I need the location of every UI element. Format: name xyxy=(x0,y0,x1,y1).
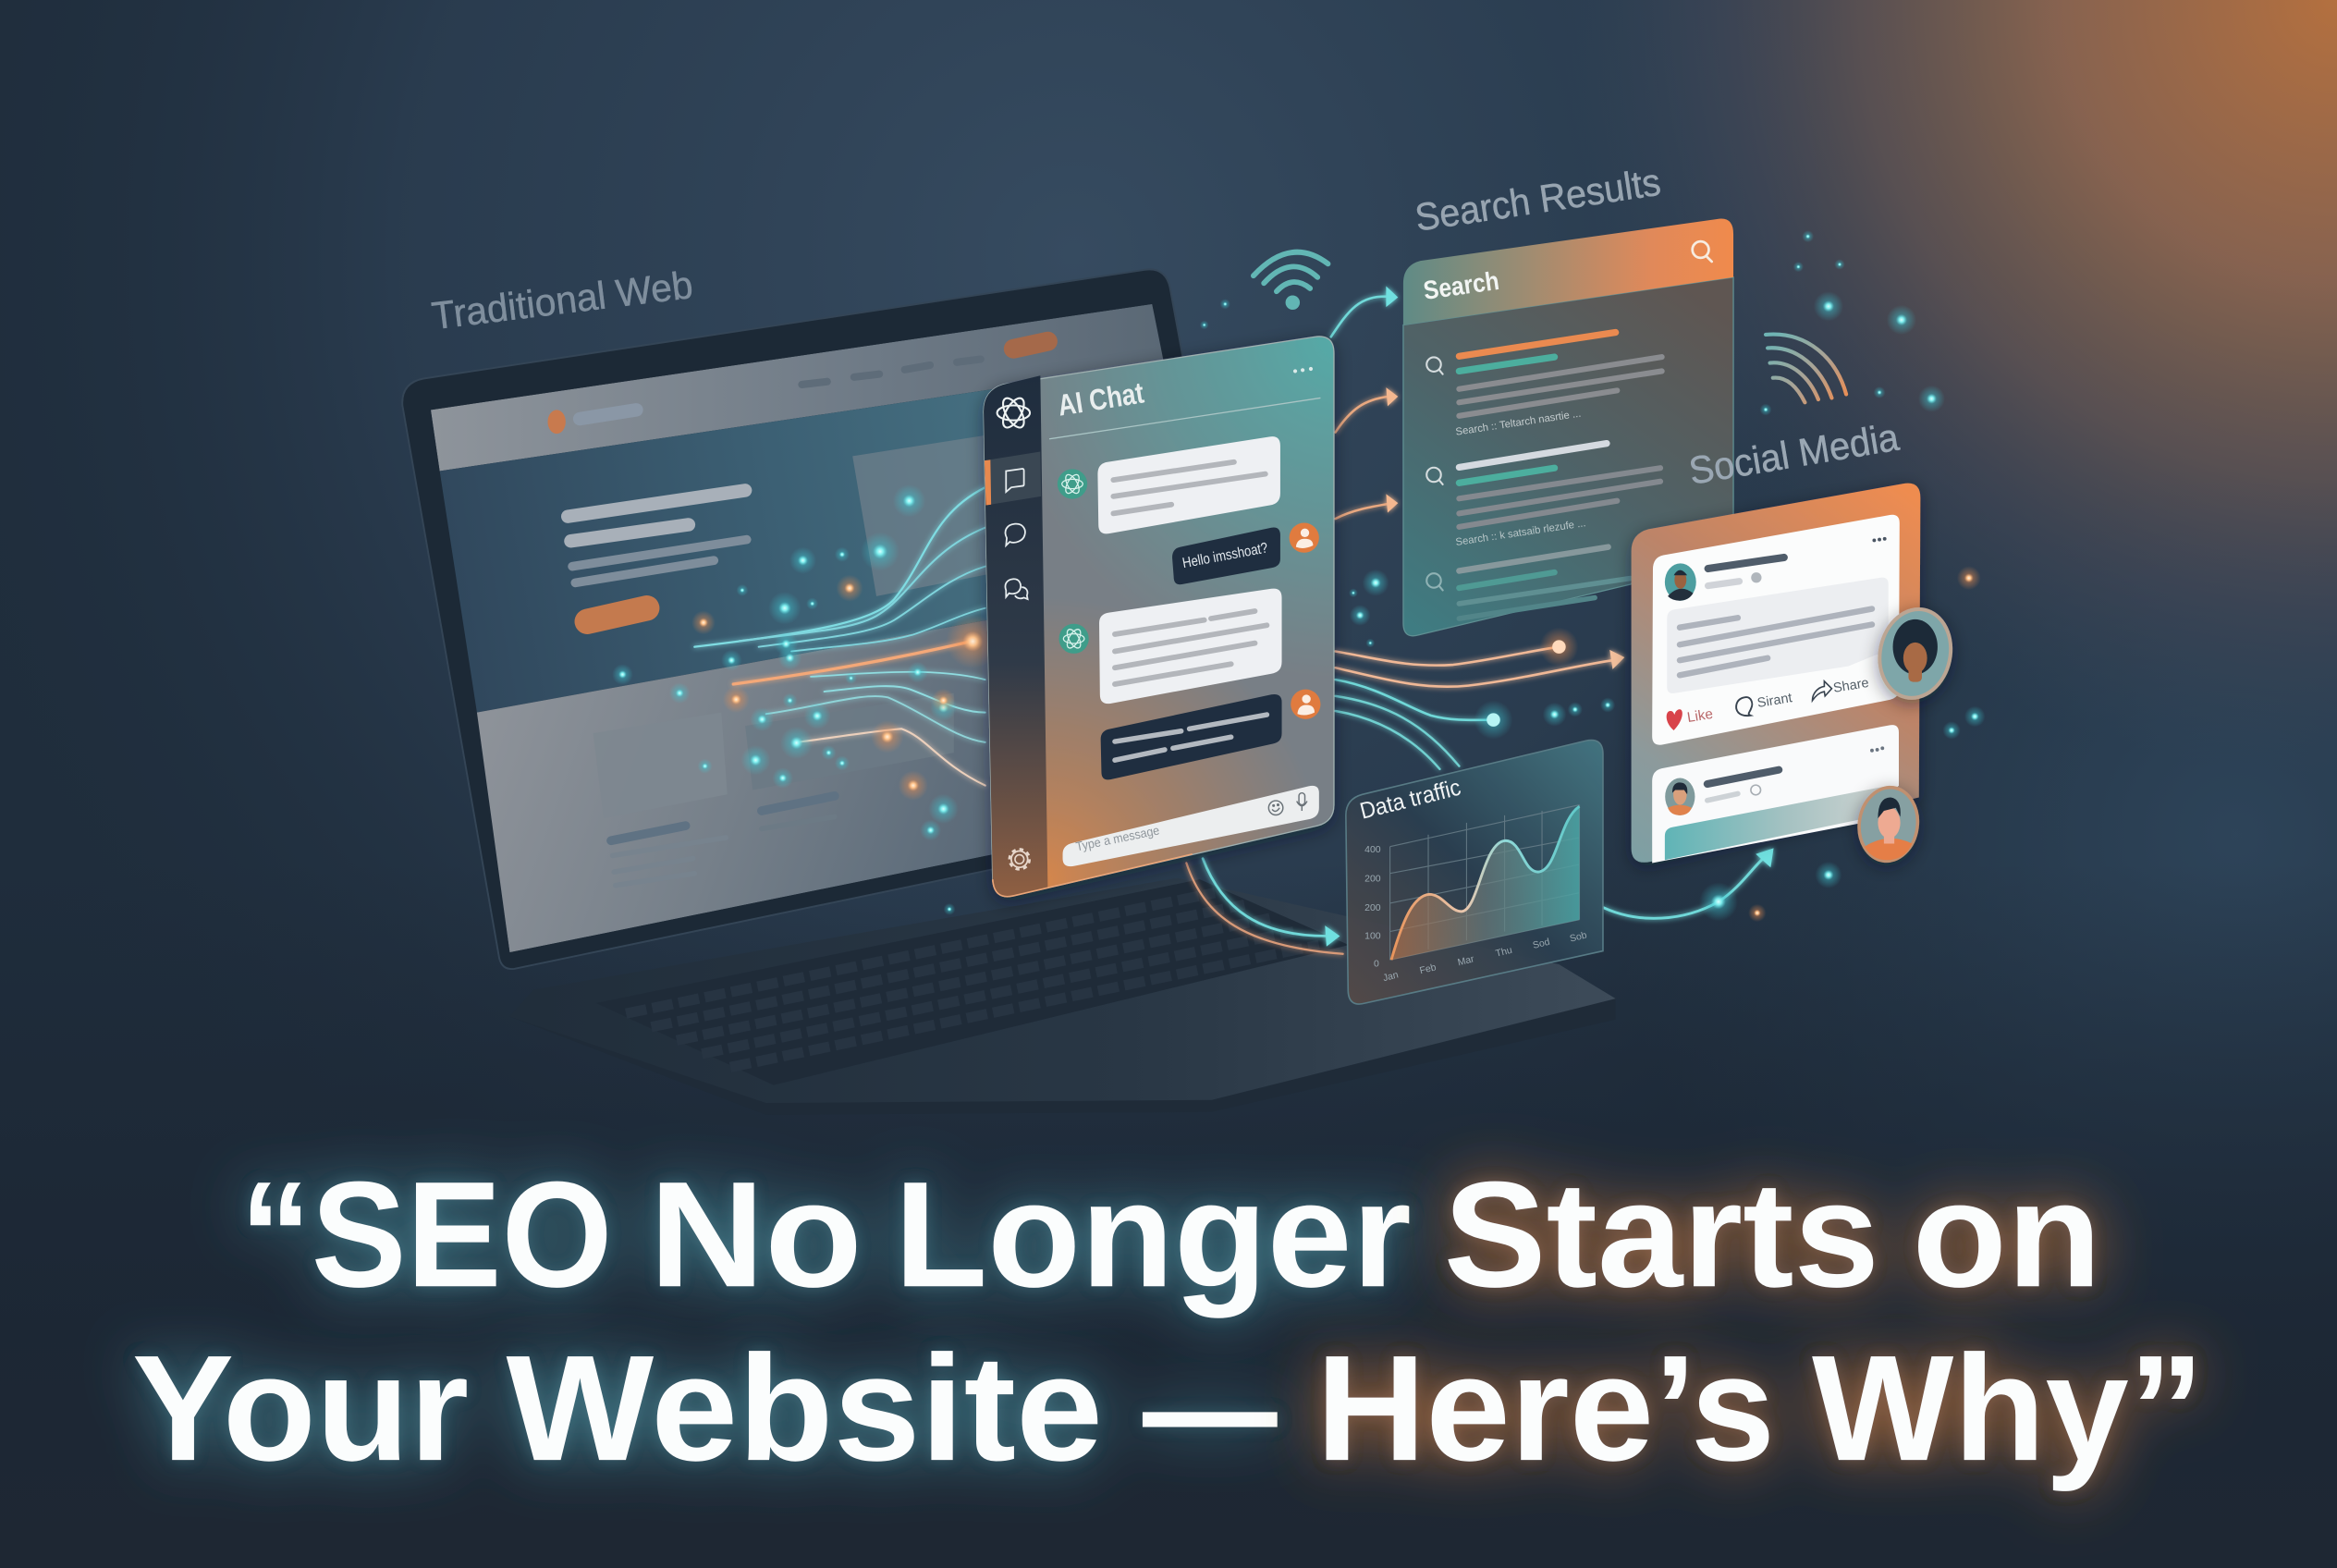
chat menu dots xyxy=(1293,367,1313,374)
laptop xyxy=(402,269,1616,1115)
search title: Search xyxy=(1422,265,1501,305)
post 1 content box xyxy=(1667,578,1889,693)
chat divider xyxy=(1049,398,1320,439)
icon: chat square xyxy=(1006,469,1024,492)
x axis labels: Feb xyxy=(1419,962,1438,976)
white bubble 1 xyxy=(1097,436,1280,533)
y axis labels: 100 xyxy=(1364,932,1381,942)
comment button xyxy=(1736,691,1793,716)
teal to dot xyxy=(1336,680,1492,720)
data to social xyxy=(1604,848,1774,918)
hero text lines xyxy=(568,490,747,582)
arrow to search orange 1 xyxy=(1336,387,1398,433)
laptop base and keyboard xyxy=(509,878,1616,1115)
post card 1 xyxy=(1652,515,1900,745)
result 1: Search :: Teltarch nasrtie ... xyxy=(1455,409,1582,438)
dark bubble 2 xyxy=(1101,694,1282,779)
x axis labels xyxy=(1382,930,1588,984)
title right part line 1: Starts xyxy=(1444,1150,1879,1318)
active sidebar row xyxy=(985,451,1041,506)
chat title: AI Chat xyxy=(1056,375,1146,423)
laptop lid xyxy=(402,269,1266,969)
label: Traditional Web: Traditional Web xyxy=(430,263,695,337)
glowing particles left xyxy=(612,484,999,915)
icon: AI logo xyxy=(997,395,1030,431)
chart grid xyxy=(1390,805,1579,960)
comment button: Sirant xyxy=(1756,691,1793,711)
data panel background xyxy=(1346,741,1603,1004)
teal to data 1 xyxy=(1336,696,1459,766)
panel: search results xyxy=(1403,219,1733,636)
post 2 menu xyxy=(1870,746,1884,753)
result 2 xyxy=(1426,444,1660,548)
title right part line 2: Why” xyxy=(1812,1324,2204,1492)
input placeholder: Type a message xyxy=(1074,823,1160,853)
x axis labels: Sob xyxy=(1569,930,1588,945)
post 1 meta xyxy=(1708,572,1762,586)
bubble 1 lines xyxy=(1113,462,1266,513)
arrow to dot orange xyxy=(1336,647,1559,666)
screen header xyxy=(431,304,1166,471)
floating avatar small xyxy=(1854,784,1922,864)
title left part line 1: Longer xyxy=(894,1150,1412,1318)
nav items xyxy=(801,360,981,385)
y axis labels: 0 xyxy=(1374,959,1379,969)
search header xyxy=(1403,219,1733,325)
lower cards xyxy=(593,713,728,818)
data title: Data traffic xyxy=(1357,775,1463,825)
post 2 meta xyxy=(1707,785,1761,801)
dark bubble 2 lines xyxy=(1115,715,1266,760)
panel: social media xyxy=(1632,484,1959,864)
data flow lines into chat xyxy=(694,487,985,786)
chat lower rim xyxy=(993,854,1193,897)
chart area xyxy=(1391,806,1579,960)
title left part line 1: No xyxy=(649,1150,863,1318)
site name bar xyxy=(580,410,636,419)
x axis labels: Thu xyxy=(1495,946,1513,960)
dark bubble 1 xyxy=(1172,527,1280,584)
title left part line 2: — xyxy=(1143,1324,1278,1492)
label: Social Media: Social Media xyxy=(1686,415,1903,493)
screen hero xyxy=(440,389,993,712)
hero button xyxy=(587,608,647,621)
white bubble 2 xyxy=(1099,589,1282,704)
icon: signal arcs xyxy=(1766,335,1846,402)
title left part line 2 xyxy=(132,1324,1278,1492)
under chat curves xyxy=(1186,863,1343,954)
floating window xyxy=(852,435,986,596)
like button xyxy=(1667,706,1714,730)
x axis labels: Sod xyxy=(1532,937,1551,951)
connectors from chat to panels xyxy=(1186,287,1774,954)
like button: Like xyxy=(1686,706,1714,726)
search body xyxy=(1403,277,1733,636)
arrow to search orange 2 xyxy=(1336,494,1398,519)
x axis labels: Jan xyxy=(1382,970,1400,984)
particles right xyxy=(1200,230,1986,922)
laptop screen xyxy=(431,304,1163,952)
icon: microphone xyxy=(1297,793,1307,811)
title right part line 1: on xyxy=(1913,1150,2101,1318)
title line 1 xyxy=(240,1150,2101,1318)
AI avatar 1 xyxy=(1058,469,1087,499)
icon: wifi top xyxy=(1254,252,1328,310)
icon: magnifier header xyxy=(1693,241,1712,262)
icon: settings gear xyxy=(1009,849,1030,869)
title right part line 2 xyxy=(1316,1324,2204,1492)
y axis labels xyxy=(1364,845,1381,969)
y axis labels: 200 xyxy=(1364,875,1381,885)
chat sidebar xyxy=(984,375,1047,897)
title left part line 1: “SEO xyxy=(240,1150,613,1318)
title left part line 2: Your xyxy=(132,1324,469,1492)
share button: Share xyxy=(1832,676,1870,696)
result 1 xyxy=(1426,333,1662,438)
share button xyxy=(1812,676,1870,701)
post 1 avatar xyxy=(1665,563,1696,601)
chat background xyxy=(984,337,1334,897)
chart line xyxy=(1391,806,1579,960)
title left part line 1 xyxy=(240,1150,1412,1318)
connector dots xyxy=(1474,628,1738,921)
user avatar 2 xyxy=(1291,690,1320,719)
active stripe xyxy=(985,459,991,506)
panel: AI chat xyxy=(984,337,1334,897)
teal to data 2 xyxy=(1336,711,1439,769)
bubble 2 lines xyxy=(1115,611,1266,684)
screen lower section xyxy=(477,619,991,952)
title line 2 xyxy=(132,1324,2204,1492)
user avatar 1 xyxy=(1290,523,1319,553)
x axis labels: Mar xyxy=(1457,954,1475,968)
title right part line 2: Here’s xyxy=(1316,1324,1775,1492)
post 2 avatar xyxy=(1665,778,1695,815)
site logo xyxy=(547,410,566,434)
social background xyxy=(1632,484,1920,863)
floating avatar large xyxy=(1872,603,1959,704)
post 2 teal image xyxy=(1665,786,1890,860)
y axis labels: 400 xyxy=(1364,845,1381,855)
title left part line 2: Website xyxy=(507,1324,1103,1492)
post 1 name xyxy=(1708,557,1784,569)
post 2 name xyxy=(1707,770,1779,784)
y axis labels: 200 xyxy=(1364,903,1381,913)
post 1 menu xyxy=(1872,537,1887,542)
nav button xyxy=(1013,341,1047,349)
post 1 text lines xyxy=(1680,609,1872,675)
post card 2 xyxy=(1652,725,1899,863)
title right part line 1 xyxy=(1444,1150,2101,1318)
dark bubble text: Hello imsshoat? xyxy=(1181,540,1269,571)
panel: data traffic xyxy=(1346,741,1603,1004)
chat input xyxy=(1063,786,1319,866)
icon: emoji xyxy=(1268,801,1283,815)
arrow to social xyxy=(1336,650,1624,687)
lower text lines xyxy=(606,791,839,845)
AI avatar 2 xyxy=(1059,624,1089,654)
result 3 xyxy=(1426,547,1631,619)
label: Search Results: Search Results xyxy=(1413,160,1663,239)
arrow to search teal xyxy=(1331,287,1398,337)
icon: chat double xyxy=(1005,579,1028,599)
icon: chat round xyxy=(1006,524,1025,545)
result 2: Search :: k satsaib rlezufe ... xyxy=(1455,518,1586,548)
